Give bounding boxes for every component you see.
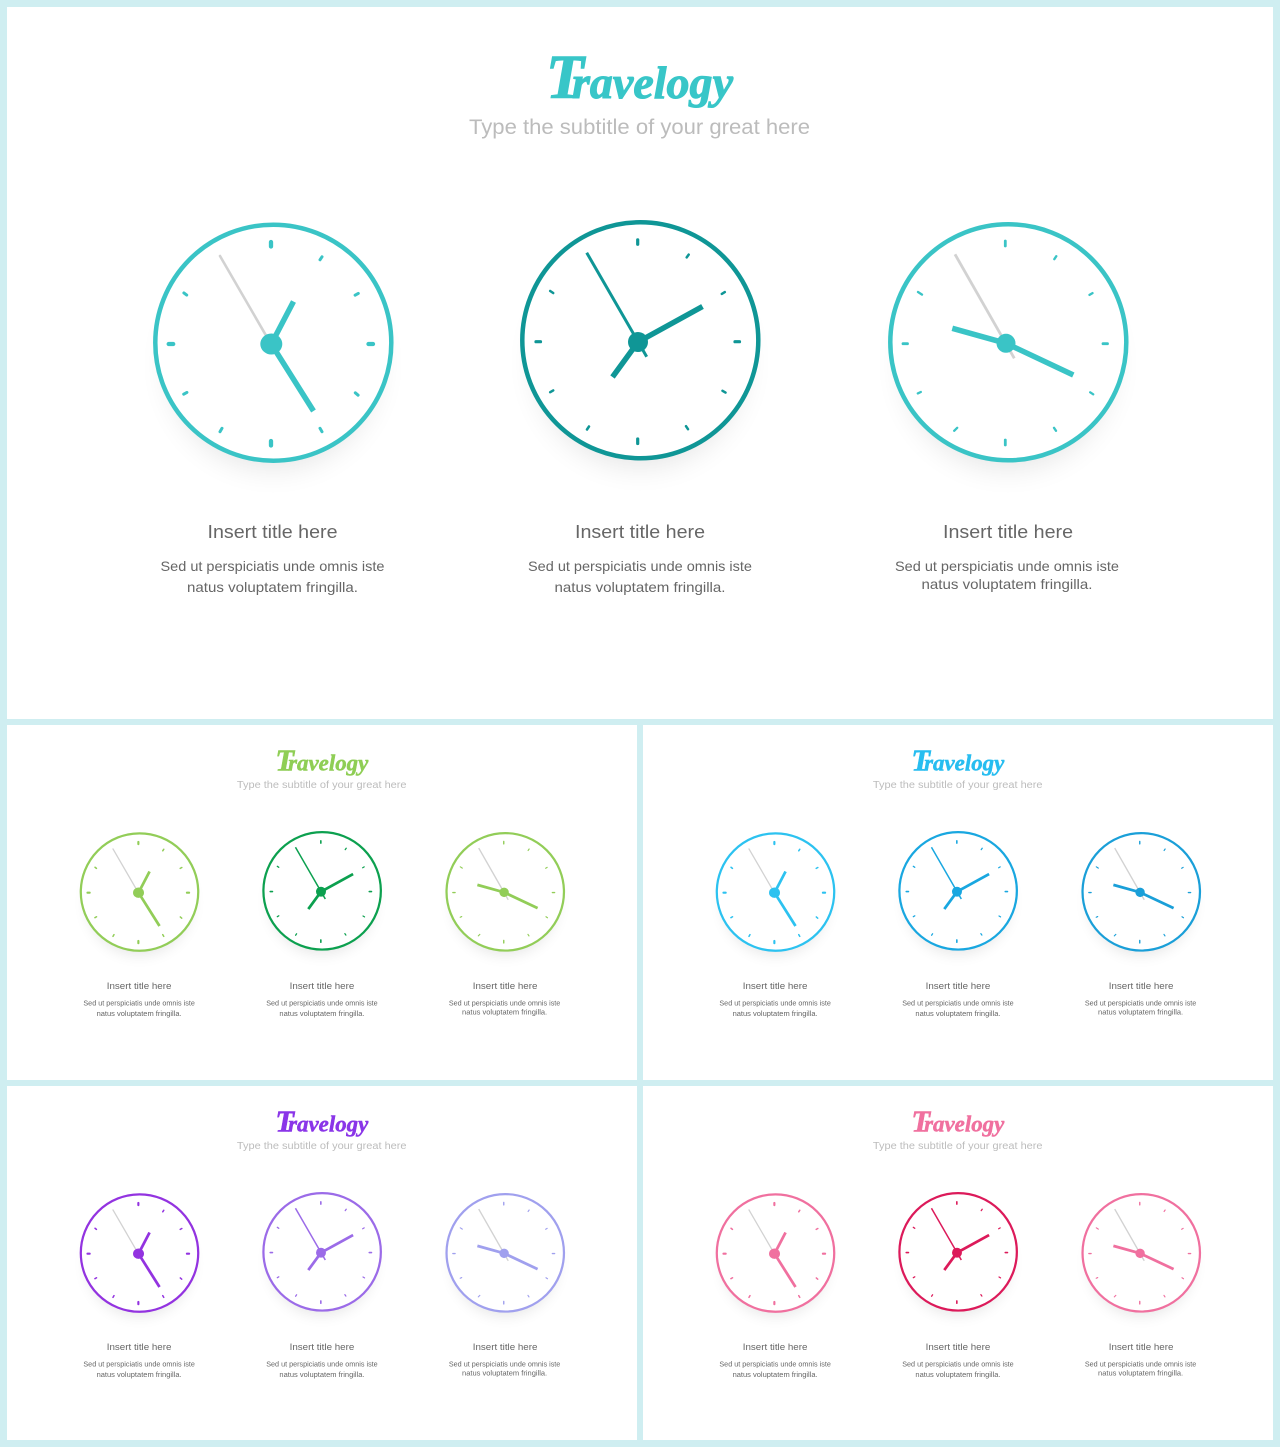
captions: blue slide: Sed ut perspiciatis unde omnis iste (1085, 1001, 1196, 1008)
captions: pink slide: Sed ut perspiciatis unde omnis iste (902, 1362, 1014, 1369)
text: center caption: natus voluptatem fringilla. (554, 579, 726, 595)
title: blue Travelogy: ravelogy (924, 750, 1005, 775)
text: right caption: Sed ut perspiciatis unde omnis iste (895, 558, 1119, 574)
panel: blue slide (643, 725, 1273, 1080)
text: left caption: Sed ut perspiciatis unde omnis iste (160, 558, 385, 574)
captions: pink slide: Insert title here (743, 1342, 807, 1352)
captions: green slide: natus voluptatem fringilla. (462, 1010, 547, 1017)
panel: green slide (7, 725, 637, 1080)
second hand (955, 254, 1014, 358)
clock: purple right (447, 1194, 564, 1315)
captions: blue slide: natus voluptatem fringilla. (915, 1011, 1001, 1018)
text: left caption: Insert title here (208, 522, 338, 542)
subtitle: purple slide: Type the subtitle of your great here (237, 1141, 407, 1152)
panel: main teal slide (7, 7, 1273, 719)
captions: pink slide: Insert title here (1109, 1342, 1173, 1352)
text: left caption (160, 522, 385, 595)
text: right caption: Insert title here (943, 522, 1073, 542)
title: green Travelogy: T (275, 743, 295, 777)
text: left caption: natus voluptatem fringilla. (187, 579, 358, 595)
clock: blue right (1083, 833, 1200, 954)
clock: center dark teal (522, 222, 758, 466)
captions: blue slide (719, 981, 1196, 1018)
clock: green center (263, 832, 381, 953)
clock: green right (447, 833, 564, 954)
title: Travelogy: ravelogy (572, 57, 734, 108)
captions: pink slide: Sed ut perspiciatis unde omnis iste (1085, 1362, 1196, 1369)
clock: pink right (1083, 1194, 1200, 1315)
hour ticks (169, 242, 373, 446)
center hub (996, 334, 1016, 353)
captions: purple slide: Insert title here (107, 1342, 171, 1352)
captions: purple slide: Insert title here (473, 1342, 537, 1352)
hands (952, 328, 1073, 375)
minute and hour hands (271, 302, 314, 411)
text: center caption: Sed ut perspiciatis unde omnis iste (528, 558, 752, 574)
captions: pink slide: natus voluptatem fringilla. (1098, 1371, 1183, 1378)
center hub (628, 332, 648, 352)
text: center caption: Insert title here (575, 522, 705, 542)
captions: purple slide (83, 1342, 560, 1379)
title: purple Travelogy: ravelogy (288, 1111, 369, 1136)
center hub (260, 334, 282, 354)
title: Travelogy: T (546, 44, 586, 112)
minute hand thin (587, 253, 647, 357)
second hand (220, 256, 278, 357)
captions: blue slide: Insert title here (1109, 981, 1173, 991)
title: green Travelogy: ravelogy (288, 750, 369, 775)
main hands (612, 306, 702, 377)
captions: blue slide: Sed ut perspiciatis unde omnis iste (719, 1001, 831, 1008)
captions: green slide: natus voluptatem fringilla. (279, 1011, 365, 1018)
captions: green slide: Insert title here (107, 981, 171, 991)
captions: pink slide: natus voluptatem fringilla. (733, 1372, 818, 1379)
captions: green slide: Insert title here (290, 981, 354, 991)
clock face ring (522, 222, 758, 458)
captions: purple slide: Sed ut perspiciatis unde omnis iste (83, 1362, 195, 1369)
text: center caption (528, 522, 752, 595)
captions: blue slide: Insert title here (926, 981, 990, 991)
captions: purple slide: Insert title here (290, 1342, 354, 1352)
clock: pink left (717, 1194, 834, 1315)
captions: green slide: Sed ut perspiciatis unde omnis iste (83, 1001, 195, 1008)
clock: pink center (899, 1193, 1017, 1314)
hour ticks (536, 240, 740, 444)
captions: purple slide: natus voluptatem fringilla. (462, 1371, 547, 1378)
panel: purple slide (7, 1086, 637, 1440)
text: right caption: natus voluptatem fringilla. (922, 576, 1092, 592)
captions: green slide: Sed ut perspiciatis unde omnis iste (449, 1001, 560, 1008)
clock: right teal (890, 224, 1126, 468)
clock face ring (155, 225, 391, 461)
title: blue Travelogy: T (911, 743, 931, 777)
captions: pink slide: natus voluptatem fringilla. (915, 1372, 1001, 1379)
clock: purple center (263, 1193, 381, 1314)
captions: pink slide: Sed ut perspiciatis unde omnis iste (719, 1362, 831, 1369)
panel: pink slide (643, 1086, 1273, 1440)
captions: purple slide: Sed ut perspiciatis unde omnis iste (449, 1362, 560, 1369)
title: pink Travelogy: T (911, 1104, 931, 1138)
captions: blue slide: Sed ut perspiciatis unde omnis iste (902, 1001, 1014, 1008)
title: pink Travelogy: ravelogy (924, 1111, 1005, 1136)
clock: purple left (81, 1194, 198, 1315)
clock: blue center (899, 832, 1017, 953)
captions: green slide: natus voluptatem fringilla. (97, 1011, 182, 1018)
captions: pink slide: Insert title here (926, 1342, 990, 1352)
captions: blue slide: Insert title here (743, 981, 807, 991)
subtitle: pink slide: Type the subtitle of your great here (873, 1141, 1043, 1152)
captions: blue slide: natus voluptatem fringilla. (733, 1011, 818, 1018)
title: purple Travelogy: T (275, 1104, 295, 1138)
clock: green left (81, 833, 198, 954)
captions: purple slide: natus voluptatem fringilla. (97, 1372, 182, 1379)
subtitle: green slide: Type the subtitle of your great here (237, 780, 407, 791)
clock: left teal (155, 225, 391, 468)
captions: purple slide: Sed ut perspiciatis unde omnis iste (266, 1362, 378, 1369)
subtitle: Type the subtitle of your great here (469, 116, 810, 139)
captions: green slide (83, 981, 560, 1018)
captions: green slide: Insert title here (473, 981, 537, 991)
captions: pink slide (719, 1342, 1196, 1379)
clock: blue left (717, 833, 834, 954)
text: right caption (895, 522, 1119, 592)
captions: purple slide: natus voluptatem fringilla. (279, 1372, 365, 1379)
subtitle: blue slide: Type the subtitle of your great here (873, 780, 1043, 791)
captions: blue slide: natus voluptatem fringilla. (1098, 1010, 1183, 1017)
clock face ring (890, 224, 1126, 460)
hour ticks (903, 241, 1108, 445)
captions: green slide: Sed ut perspiciatis unde omnis iste (266, 1001, 378, 1008)
